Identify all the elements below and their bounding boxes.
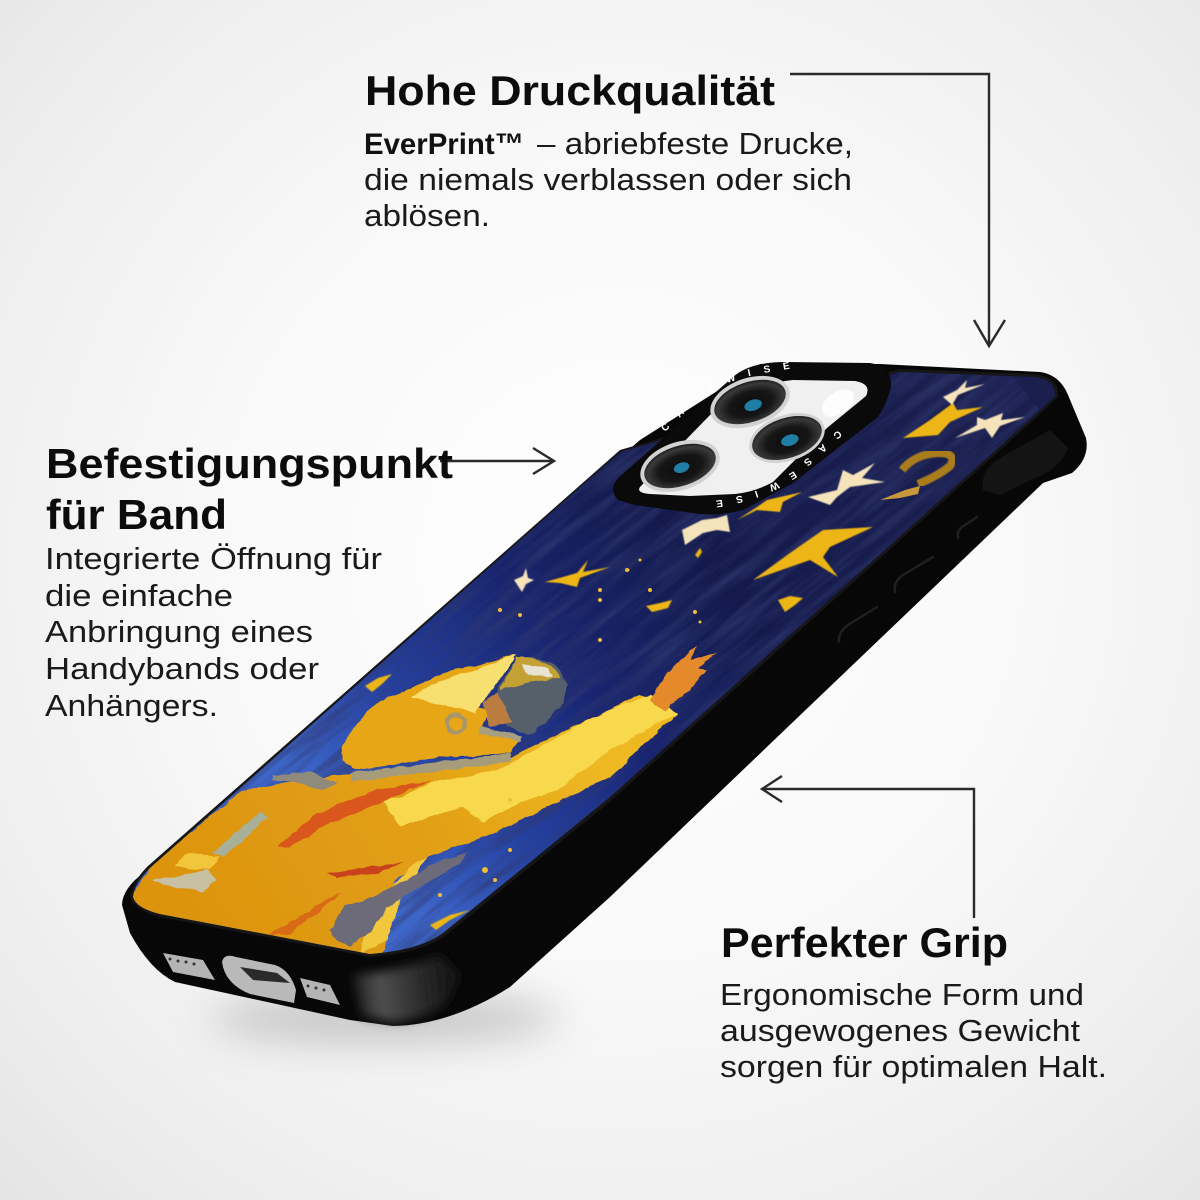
hood highlight [410, 655, 517, 712]
heading: grip: Perfekter Grip [721, 919, 1008, 966]
face [483, 692, 512, 728]
text block: print quality: EverPrint™ [364, 128, 524, 161]
pale stars [514, 380, 1025, 592]
text block: strap attachment: Anhängers. [45, 688, 218, 723]
text block: strap attachment: Integrierte Öffnung für [45, 541, 382, 576]
lower red band [327, 863, 403, 878]
ring lettering bottom: CASEWISE [716, 432, 842, 508]
ring lettering top: CASEWISE [662, 362, 790, 430]
tan comet [880, 486, 920, 500]
text block: print quality [364, 126, 853, 233]
side buttons [839, 517, 977, 642]
suit body [125, 695, 678, 962]
phone case illustration [122, 362, 1087, 1029]
camera lens left [634, 431, 726, 501]
astronaut figure [125, 645, 717, 962]
arrow: strap attachment [440, 448, 554, 474]
text block: grip [720, 977, 1107, 1084]
heading: strap attachment: für Band [46, 491, 227, 538]
pale green strap [213, 812, 268, 857]
helmet visor [487, 657, 566, 734]
camera plate [639, 380, 868, 496]
jet tool [330, 853, 467, 947]
text block: strap attachment: Anbringung eines [45, 614, 313, 649]
lower orange stripe [267, 893, 343, 937]
right speaker grille [300, 978, 340, 1005]
text block: strap attachment: die einfache [45, 578, 233, 613]
lower yellow patch [360, 857, 427, 953]
camera flash [817, 384, 859, 422]
helmet shine [522, 664, 552, 678]
text block: grip: sorgen für optimalen Halt. [720, 1049, 1107, 1084]
collar [478, 727, 523, 742]
case corner gloss [352, 955, 462, 1022]
backpack bump [173, 853, 220, 870]
hand [650, 645, 717, 712]
case body [122, 364, 1087, 1026]
camera lens top [704, 367, 796, 437]
golden stars [365, 403, 983, 930]
text block: strap attachment: Handybands oder [45, 651, 319, 686]
sky brush texture [139, 372, 1039, 952]
hood [343, 655, 520, 770]
text block: grip: Ergonomische Form und [720, 977, 1084, 1012]
charging port [222, 956, 296, 1003]
backpack box [153, 870, 217, 892]
ear ring [447, 714, 465, 732]
text block: print quality: ablösen. [364, 198, 490, 233]
camera ring [613, 362, 891, 514]
sleeve highlight [383, 695, 678, 827]
left speaker grille [163, 953, 215, 980]
heading: strap attachment [46, 440, 453, 538]
text block: grip: ausgewogenes Gewicht [720, 1013, 1080, 1048]
heading: print quality: Hohe Druckqualität [365, 67, 775, 114]
arrow: grip [762, 776, 974, 918]
helmet gold reflection [500, 657, 561, 690]
heading: strap attachment: Befestigungspunkt [46, 440, 453, 487]
red sash [277, 780, 433, 847]
backpack strap [273, 772, 337, 790]
camera lens right [743, 404, 831, 472]
phone shadow [210, 992, 560, 1044]
arrow: print quality [790, 74, 1005, 346]
star specks [438, 558, 702, 897]
text block: print quality: die niemals verblassen oder sich [364, 162, 852, 197]
grey strap [350, 753, 510, 782]
case bezel rim [130, 369, 1058, 957]
side switch bump [983, 430, 1068, 495]
night sky [120, 360, 1070, 960]
printed artwork [133, 372, 1055, 954]
text block: strap attachment [45, 541, 382, 723]
text block: print quality: – abriebfeste Drucke, [537, 126, 853, 161]
swirl mark [902, 453, 952, 484]
